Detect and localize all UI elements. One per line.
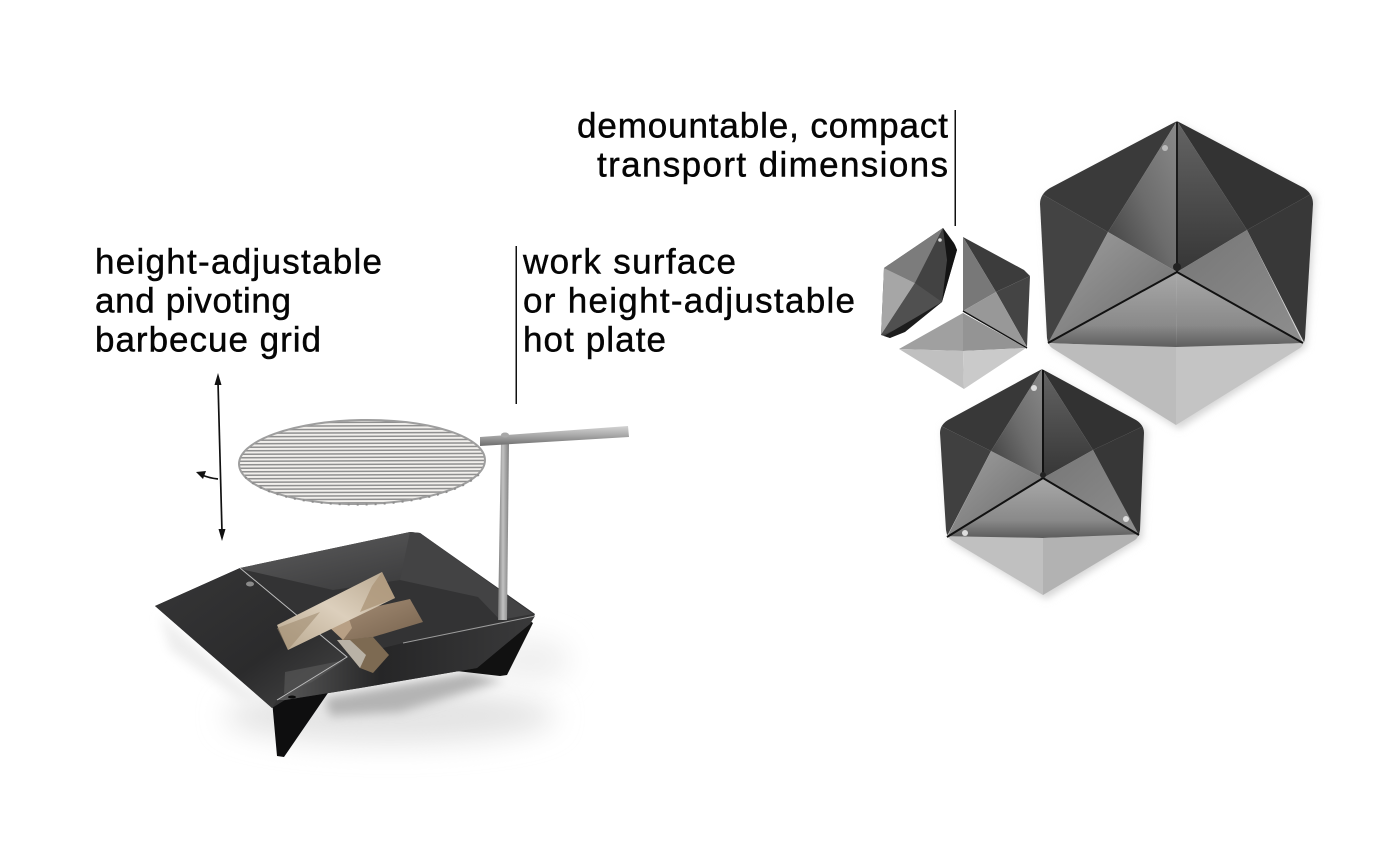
arrow: pivot direction <box>196 471 218 479</box>
label: work surface or hot plate: work surface <box>522 242 736 282</box>
label: work surface or hot plate <box>522 242 855 360</box>
arrow: vertical height adjustment <box>214 373 226 541</box>
piece: rotated segment <box>881 228 957 338</box>
callout line: transport dimensions <box>954 110 956 226</box>
medium assembled hexagon <box>935 369 1150 600</box>
label: height-adjustable grid: barbecue grid <box>95 320 321 360</box>
fire bowl plate <box>155 532 535 708</box>
callout line: work surface <box>516 246 517 404</box>
label: work surface or hot plate: hot plate <box>523 320 666 360</box>
front left foot <box>272 690 330 757</box>
label: height-adjustable grid: height-adjustable <box>95 242 382 282</box>
demounted set of three panels <box>881 228 1030 389</box>
label: demountable transport dimensions <box>577 106 948 184</box>
handle <box>480 426 629 446</box>
large assembled hexagon <box>1035 121 1318 430</box>
label: height-adjustable grid <box>95 242 382 360</box>
piece: lower segment <box>899 313 1026 389</box>
label: demountable transport dimensions: transport dimensions <box>597 146 948 184</box>
round grill <box>238 418 486 507</box>
shadow under fire pit <box>160 615 570 744</box>
logs <box>277 572 423 673</box>
post <box>498 442 509 620</box>
back right foot <box>448 621 533 676</box>
piece: upper right segment <box>963 237 1030 348</box>
fire pit with grill <box>155 418 629 757</box>
label: work surface or hot plate: or height-adjustable <box>523 282 855 320</box>
label: demountable transport dimensions: demountable, compact <box>577 106 948 146</box>
label: height-adjustable grid: and pivoting <box>95 282 291 320</box>
